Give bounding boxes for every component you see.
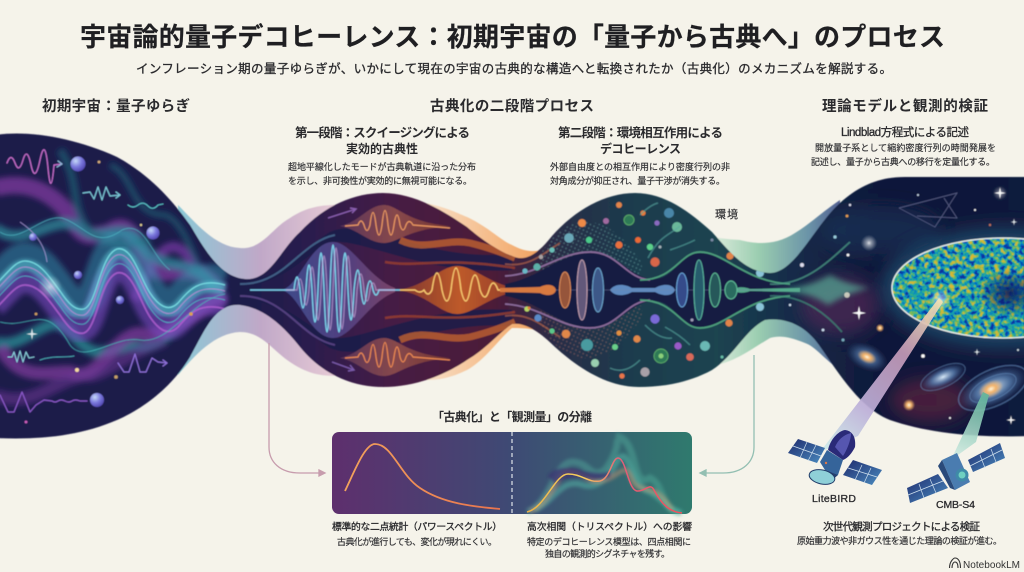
title: 宇宙論的量子デコヒーレンス：初期宇宙の「量子から古典へ」のプロセス [80, 22, 945, 52]
soft wings around necks [178, 200, 840, 380]
quantum spheres [25, 156, 193, 423]
beam: LiteBIRD [820, 298, 943, 452]
text block: Lindblad [811, 125, 996, 167]
particles inside [522, 202, 764, 379]
satellite: CMB-S4 [907, 443, 1005, 503]
nebula [800, 275, 880, 335]
label: LiteBIRD: LiteBIRD [812, 493, 856, 505]
caption: power spectrum: 標準的な二点統計（パワースペクトル） [332, 520, 502, 533]
satellite: LiteBIRD [788, 430, 882, 487]
text block: stage two: 対角成分が抑圧され、量子干渉が消失する。 [550, 175, 725, 186]
chart: power spectrum curve [345, 444, 500, 509]
wave: blue [250, 245, 400, 332]
glow node [39, 276, 62, 298]
arrows [328, 208, 356, 218]
wave: orange [399, 266, 501, 302]
caption: next-generation projects: 原始重力波や非ガウス性を通じた理論の検証が進む。 [797, 535, 1002, 546]
text block: Lindblad: 開放量子系として縮約密度行列の時間発展を [815, 142, 996, 153]
arrow: from decoherence to trispectrum [700, 355, 754, 476]
caption: trispectrum: 独自の観測的シグネチャを残す。 [545, 548, 670, 559]
panel: stage one squeezing [230, 205, 530, 376]
text block: stage one: 実効的古典性 [346, 141, 418, 156]
text block: Lindblad: 記述し、量子から古典への移行を定量化する。 [811, 156, 995, 167]
caption: trispectrum [527, 520, 692, 559]
panel: stage two environment decoherence [500, 202, 800, 379]
panel: spectra comparison [332, 432, 692, 514]
caption: power spectrum: 古典化が進行しても、変化が現れにくい。 [337, 536, 497, 547]
NotebookLM logo: NotebookLM [963, 560, 1020, 571]
dark flowing body [0, 134, 1024, 438]
text block: Lindblad: Lindblad方程式による記述 [841, 125, 970, 139]
caption: trispectrum: 高次相関（トリスペクトル）への影響 [527, 520, 692, 533]
heading: two-step process: 古典化の二段階プロセス [430, 97, 594, 115]
halftone dots [540, 222, 642, 280]
ribbons [0, 150, 225, 399]
text block: stage one: 第一段階：スクイージングによる [295, 125, 470, 140]
heading: early universe: 初期宇宙：量子ゆらぎ [42, 97, 190, 115]
text block: stage one: 超地平線化したモードが古典軌道に沿った分布 [288, 161, 476, 172]
subtitle: インフレーション期の量子ゆらぎが、いかにして現在の宇宙の古典的な構造へと転換されたか（古典化）のメカニズムを解説する。 [136, 61, 892, 76]
main stream illustration [0, 134, 1024, 438]
heading: theory and observation: 理論モデルと観測的検証 [822, 97, 988, 115]
panel: observed universe [770, 186, 1024, 425]
galaxies [846, 342, 1024, 412]
NotebookLM logo [950, 558, 1020, 571]
text block: stage two [550, 125, 730, 186]
caption: power spectrum [332, 520, 502, 547]
lens: blue wave packet [282, 242, 395, 338]
caption: next-generation projects: 次世代観測プロジェクトによる検証 [823, 520, 980, 533]
caption: next-generation projects [797, 520, 1002, 546]
text block: stage two: デコヒーレンス [600, 141, 681, 156]
divider [511, 432, 513, 514]
constellation lines [899, 193, 957, 227]
text block: stage two: 外部自由度との相互作用により密度行列の非 [550, 161, 730, 172]
central filaments [500, 285, 556, 295]
chart: trispectrum curves [527, 436, 682, 513]
label: CMB-S4: CMB-S4 [936, 499, 975, 511]
orange streams [385, 240, 515, 340]
lens: orange wave packet [402, 265, 506, 315]
dark navy bands [282, 228, 512, 274]
caption: trispectrum: 特定のデコヒーレンス模型は、四点相関に [527, 536, 691, 547]
boundary lines [505, 243, 790, 337]
satellite beams [820, 298, 989, 460]
beam: CMB-S4 [951, 392, 989, 460]
arrow: from squeezing to power spectrum [269, 343, 325, 476]
small waves with arrows [0, 150, 167, 412]
panel: early universe quantum fluctuations [0, 150, 225, 423]
wave: lower orange [345, 342, 450, 367]
lens: upper packet [340, 205, 450, 243]
CMB sky map [881, 228, 1024, 348]
stars [774, 186, 1019, 425]
heading: separation: 「古典化」と「観測量」の分離 [432, 409, 592, 424]
wave: upper orange [345, 210, 450, 235]
text block: stage one: を示し、非可換性が実効的に無視可能になる。 [288, 175, 472, 186]
neck bands [240, 235, 335, 284]
decohering lobes [560, 260, 737, 320]
dark centre [505, 253, 790, 327]
lens: lower packet [340, 338, 450, 376]
environment label: 環境 [715, 208, 738, 221]
main wave strands [0, 218, 225, 352]
text block: stage two: 第二段階：環境相互作用による [558, 125, 723, 140]
text block: stage one [288, 125, 476, 186]
